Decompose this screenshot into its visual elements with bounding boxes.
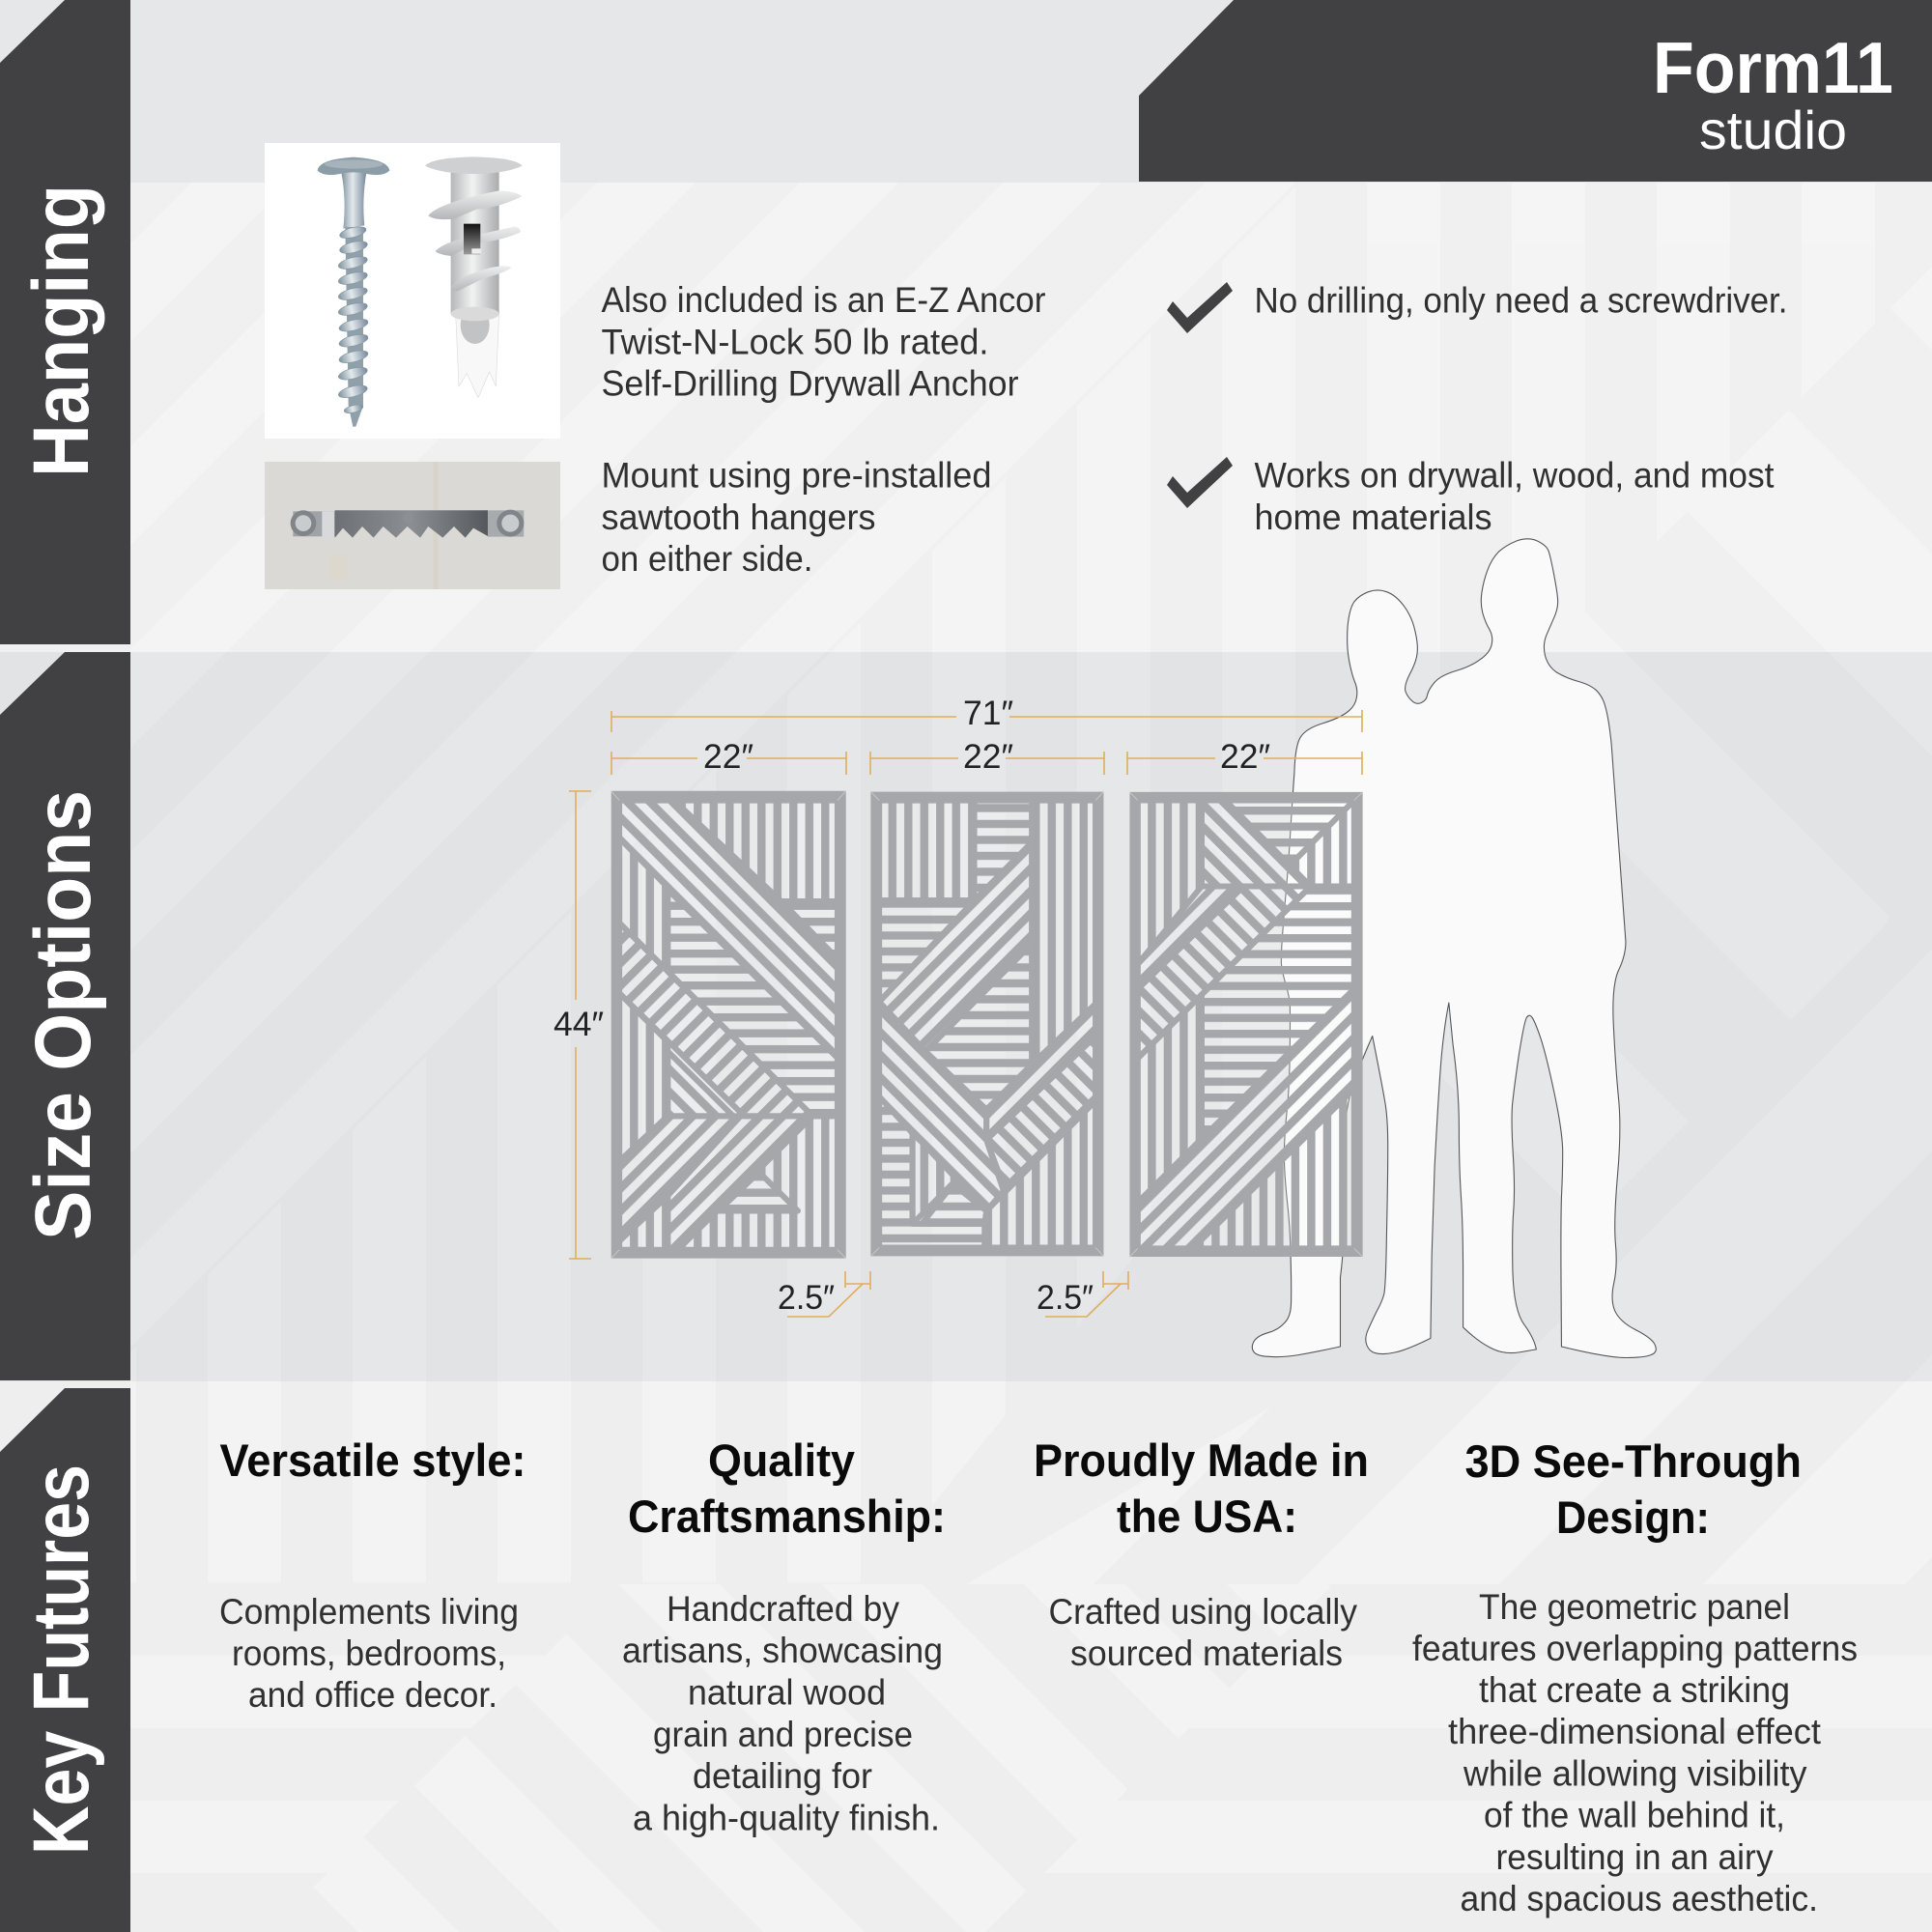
feature column: made in the USA: [1034, 1435, 1369, 1673]
header with logo: Form11: [1653, 27, 1893, 108]
heading: [1034, 1435, 1369, 1542]
image: sawtooth hanger photo: [265, 462, 560, 589]
body text: that create a striking: [1479, 1670, 1790, 1710]
feature column: 3D see-through design: [1412, 1435, 1858, 1918]
figure: two people silhouette for scale: [1252, 539, 1656, 1358]
sidebar: Hanging: Hanging: [17, 185, 105, 477]
text: no drilling: No drilling, only need a screwdriver.: [1254, 280, 1787, 321]
heading: [628, 1435, 946, 1542]
body text: Handcrafted by: [667, 1589, 899, 1629]
background: soften stripes in size section: [0, 652, 1932, 1381]
dimension: height 44 inch: 44″: [554, 1006, 604, 1043]
body text: while allowing visibility: [1463, 1754, 1807, 1793]
panel 3: geometric art: [1129, 792, 1363, 1257]
sidebar: Size Options: [0, 652, 130, 1380]
body text: Crafted using locally: [1049, 1592, 1357, 1632]
panel 2: geometric art: [870, 792, 1103, 1256]
sidebar: Key Futures: [0, 1388, 130, 1932]
body text: [1412, 1587, 1858, 1918]
sidebar: Hanging: [0, 0, 130, 644]
heading: 3D See-Through: [1464, 1435, 1802, 1487]
text: sawtooth description: [601, 456, 991, 579]
dimension: panel 1 width: 22″: [703, 738, 753, 776]
icon: screw: [318, 157, 389, 427]
text: sawtooth description: on either side.: [601, 539, 813, 579]
panel 1: geometric art: [611, 791, 846, 1259]
heading: Design:: [1556, 1492, 1710, 1543]
dimension: height 44 inch: [554, 791, 604, 1259]
body text: detailing for: [693, 1756, 872, 1796]
body text: sourced materials: [1070, 1634, 1343, 1673]
text: sawtooth description: sawtooth hangers: [601, 497, 875, 537]
body text: grain and precise: [653, 1715, 913, 1754]
header with logo: studio: [1699, 99, 1847, 160]
body text: The geometric panel: [1479, 1587, 1790, 1627]
feature column: versatile style: [219, 1435, 526, 1715]
dimension: gap 2.5 inch right: [1037, 1271, 1128, 1317]
dimension: gap 2.5 inch left: 2.5″: [778, 1279, 835, 1317]
heading: Craftsmanship:: [628, 1491, 946, 1542]
text: anchor description: [601, 280, 1045, 404]
body text: and spacious aesthetic.: [1461, 1879, 1818, 1918]
dimension: 71 inch total width: 71″: [963, 695, 1013, 732]
body text: rooms, bedrooms,: [232, 1634, 506, 1673]
text: anchor description: Self-Drilling Drywall Anchor: [601, 363, 1018, 404]
icon: check mark 2: [1167, 457, 1233, 508]
body text: [622, 1589, 943, 1837]
heading: [1464, 1435, 1802, 1543]
dimension: gap 2.5 inch left: [778, 1271, 870, 1317]
icon: drywall anchor: [425, 156, 523, 398]
heading: the USA:: [1117, 1491, 1297, 1542]
body text: a high-quality finish.: [633, 1799, 940, 1837]
body text: features overlapping patterns: [1412, 1629, 1858, 1668]
text: works on: Works on drywall, wood, and most: [1254, 456, 1775, 495]
feature column: quality craftsmanship: [622, 1435, 946, 1837]
dimension: panel 2 width: [870, 738, 1104, 776]
body text: and office decor.: [248, 1675, 497, 1715]
body text: Complements living: [219, 1592, 519, 1632]
text: anchor description: Twist-N-Lock 50 lb rated.: [601, 323, 989, 361]
dimension: gap 2.5 inch right: 2.5″: [1037, 1279, 1094, 1317]
body text: natural wood: [688, 1673, 886, 1712]
image: screw and drywall anchor: [265, 143, 560, 439]
body text: resulting in an airy: [1495, 1837, 1774, 1877]
body text: of the wall behind it,: [1484, 1795, 1785, 1835]
body text: [219, 1592, 519, 1715]
sidebar: Size Options: Size Options: [19, 790, 107, 1240]
heading: Proudly Made in: [1034, 1435, 1369, 1486]
text: works on: [1254, 456, 1775, 537]
sidebar: Key Futures: Key Futures: [17, 1464, 105, 1855]
text: sawtooth description: Mount using pre-installed: [601, 456, 991, 495]
dimension: 71 inch total width: [611, 695, 1362, 732]
dimension: panel 2 width: 22″: [963, 738, 1013, 776]
heading: Versatile style:: [220, 1435, 526, 1486]
dimension: panel 3 width: [1127, 738, 1362, 776]
body text: [1049, 1592, 1357, 1673]
body text: artisans, showcasing: [622, 1631, 943, 1670]
header with logo: [1139, 0, 1932, 182]
heading: Quality: [708, 1435, 855, 1486]
dimension: panel 3 width: 22″: [1220, 738, 1270, 776]
text: works on: home materials: [1254, 497, 1492, 537]
body text: three-dimensional effect: [1448, 1712, 1822, 1751]
icon: check mark 1: [1167, 282, 1233, 333]
text: anchor description: Also included is an E-Z Ancor: [601, 280, 1045, 320]
dimension: panel 1 width: [611, 738, 846, 776]
